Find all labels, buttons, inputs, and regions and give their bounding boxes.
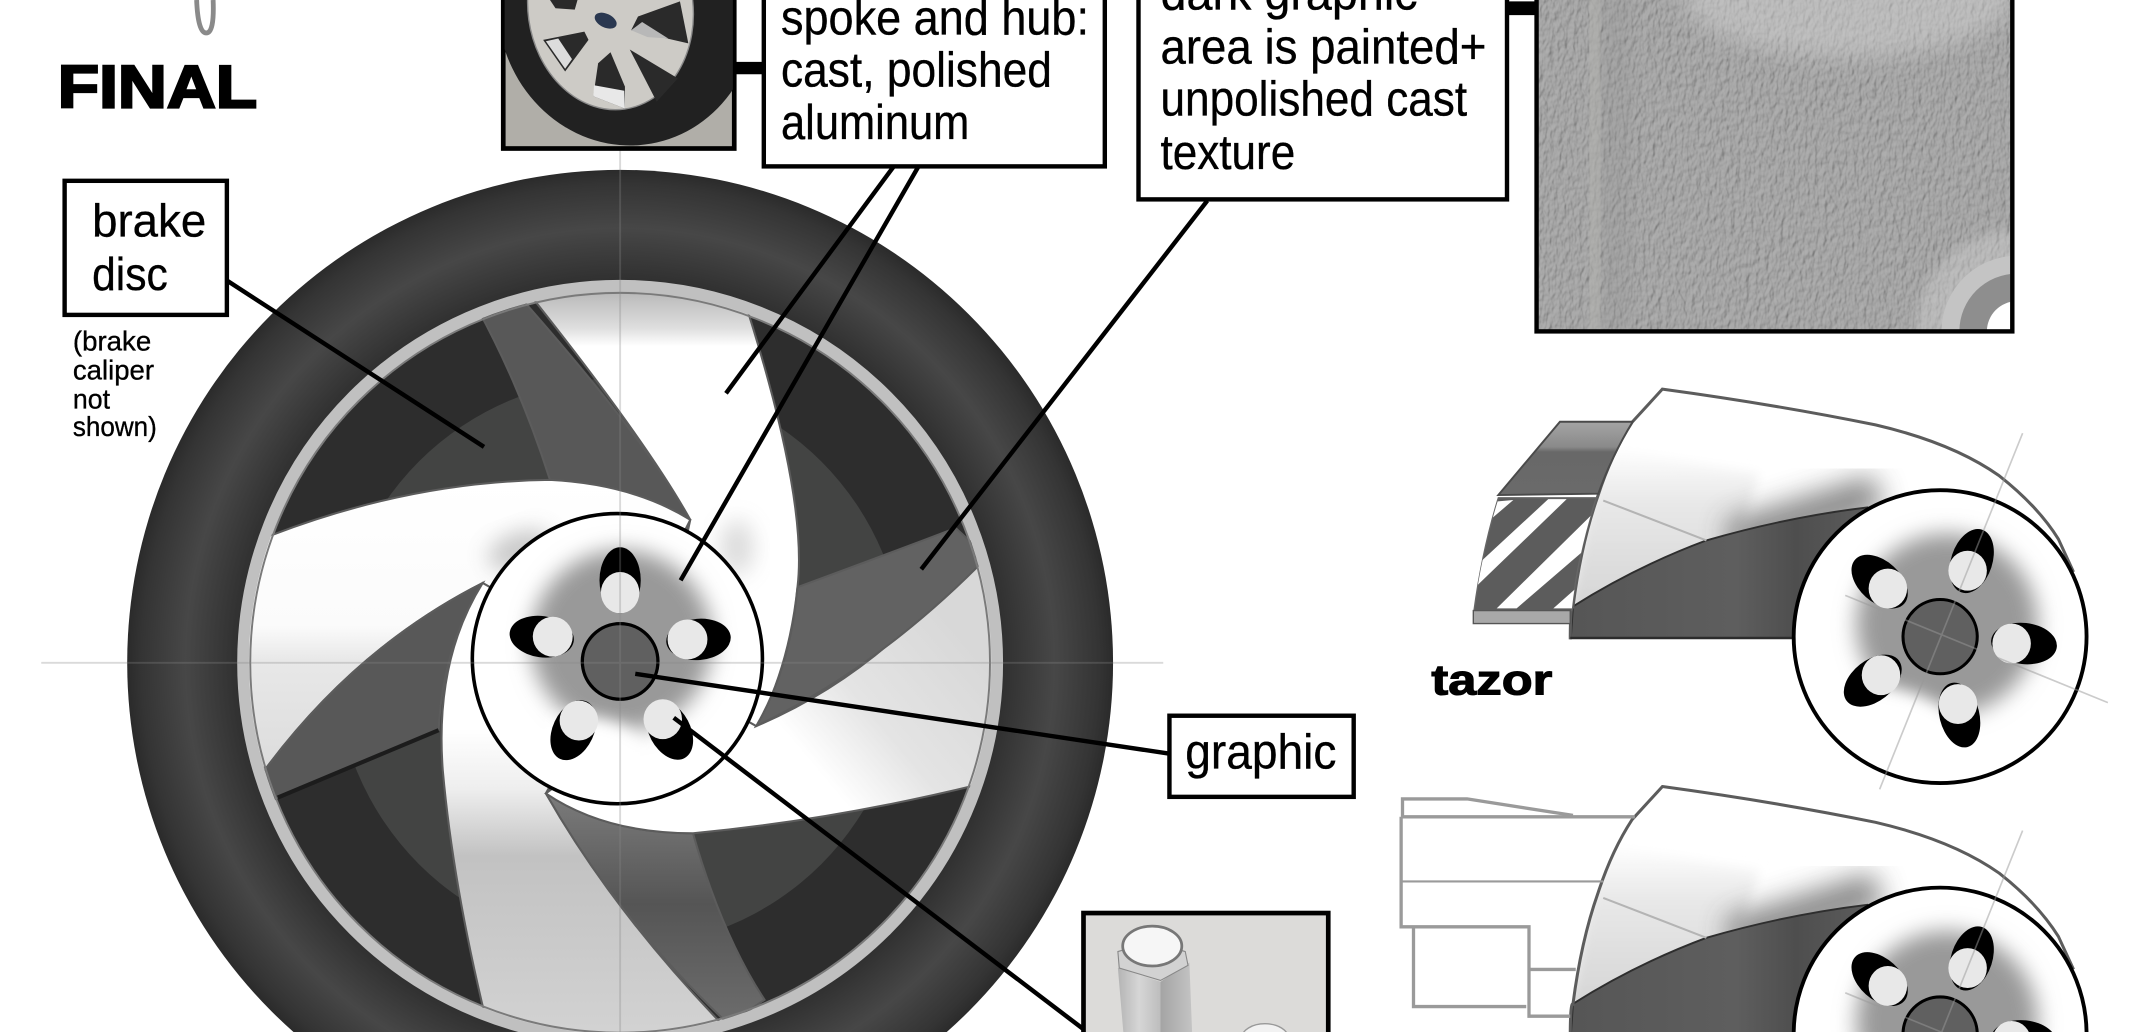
- connector: photo to spoke callout: [736, 62, 764, 74]
- spoke: top polished: [520, 282, 799, 729]
- rear block base strip: [1473, 611, 1570, 624]
- rear block striped panel: [1474, 498, 1596, 611]
- small wheel construction lines: [1845, 433, 2108, 789]
- note: brake caliper not shown: [73, 326, 157, 442]
- rear block outline, lower concept: [1401, 799, 1635, 1016]
- second lug nut: [1242, 1024, 1288, 1032]
- spoke: left polished: [234, 480, 690, 770]
- photo: polished aluminum wheel: [500, 0, 737, 151]
- raised highlight at top: [1684, 0, 2014, 58]
- callout: spoke and hub: cast, polished: [781, 43, 1052, 98]
- callout: spoke and hub: [764, 0, 1105, 166]
- lug nut dome: [1123, 926, 1182, 966]
- small wheel: [1794, 433, 2108, 789]
- dark edge line under left ribbon: [278, 730, 439, 798]
- note: brake caliper not shown: shown): [73, 411, 157, 442]
- lug nut hex body: [1118, 968, 1160, 1032]
- center badge: [594, 12, 617, 29]
- callout: dark graphic area: unpolished cast: [1160, 72, 1467, 127]
- small wheel center cap: [1903, 600, 1977, 674]
- callout: graphic: graphic: [1185, 725, 1337, 780]
- callout: brake disc: [65, 181, 227, 315]
- callout: dark graphic area: [1138, 0, 1507, 199]
- note: brake caliper not shown: caliper: [73, 355, 154, 386]
- wheel spokes: [234, 282, 1011, 1032]
- rim band: [244, 287, 996, 1032]
- rear block with stripes: [1473, 422, 1633, 624]
- leader line: dark graphic area: [921, 201, 1207, 569]
- bolt hole in casting: [1913, 228, 2010, 330]
- lower light panel: [1568, 447, 1760, 619]
- note: brake caliper not shown: not: [73, 383, 110, 414]
- leader line: brake disc: [227, 281, 484, 447]
- vertical fold in casting: [1590, 0, 1600, 330]
- concept: fender and wheel, lower: [1568, 787, 2108, 1032]
- soft shadows next to hub: [483, 520, 754, 578]
- spoke ribbon: left graphic: [256, 583, 483, 811]
- shadow beside the fold: [1600, 0, 1631, 330]
- spoke: bottom polished: [442, 583, 742, 1032]
- center cap: [582, 624, 658, 699]
- white stripes: [1474, 499, 1591, 608]
- fender shading: [1568, 447, 1878, 646]
- leader line: spoke: [726, 166, 894, 393]
- connector: dark graphic callout to texture photo: [1507, 1, 1537, 15]
- concept: fender and wheel, upper: [1568, 389, 2108, 789]
- callout: brake disc: brake: [92, 195, 206, 247]
- title: FINAL: FINAL: [58, 52, 257, 120]
- leader line: lug nut: [674, 718, 1086, 1031]
- callout: spoke and hub: aluminum: [781, 95, 969, 150]
- label: tazor: tazor: [1431, 656, 1552, 704]
- hub: [472, 514, 762, 804]
- lug nut collar: [1118, 946, 1188, 980]
- photo: unpolished cast texture: [1534, 0, 2014, 334]
- construction line on fender: [1603, 501, 1706, 540]
- callout: dark graphic area: area is painted+: [1160, 19, 1486, 74]
- dark windows in rim: [543, 0, 688, 109]
- tire: [127, 170, 1113, 1032]
- rim inner edge line: [250, 293, 990, 1032]
- spoke: right polished: [546, 550, 1011, 833]
- note: brake caliper not shown: (brake: [73, 326, 151, 357]
- chrome reflections in rim: [546, 22, 668, 109]
- leader line: graphic: [635, 674, 1169, 754]
- wheel shadow: [1730, 492, 1878, 539]
- small wheel lug holes: [1834, 523, 2059, 752]
- tire in photo: [504, 0, 733, 146]
- photo: lug nuts: [1084, 913, 1328, 1032]
- spoke ribbon: right graphic: [756, 528, 987, 726]
- fender body: [1570, 389, 2076, 638]
- icon: partial sketch loop above the title: [197, 0, 213, 33]
- spoke ribbon: upper-left graphic: [476, 300, 690, 520]
- brake disc: [336, 378, 905, 947]
- callout: brake disc: disc: [92, 248, 168, 300]
- callout: graphic: [1169, 716, 1354, 797]
- leader line: hub: [681, 166, 918, 580]
- rear block upper: [1498, 422, 1633, 495]
- callout: dark graphic area: texture: [1160, 125, 1295, 180]
- small wheel shading: [1832, 534, 2038, 789]
- fender base line: [1570, 637, 1801, 639]
- lug holes: [507, 547, 732, 768]
- dark lower graphic: [1570, 507, 1870, 646]
- main wheel illustration: [127, 170, 1113, 1032]
- chrome rim in photo: [526, 0, 694, 110]
- fender outline: [1570, 389, 2074, 639]
- construction guides: [41, 149, 1163, 1032]
- spoke ribbon: bottom graphic: [546, 793, 764, 1024]
